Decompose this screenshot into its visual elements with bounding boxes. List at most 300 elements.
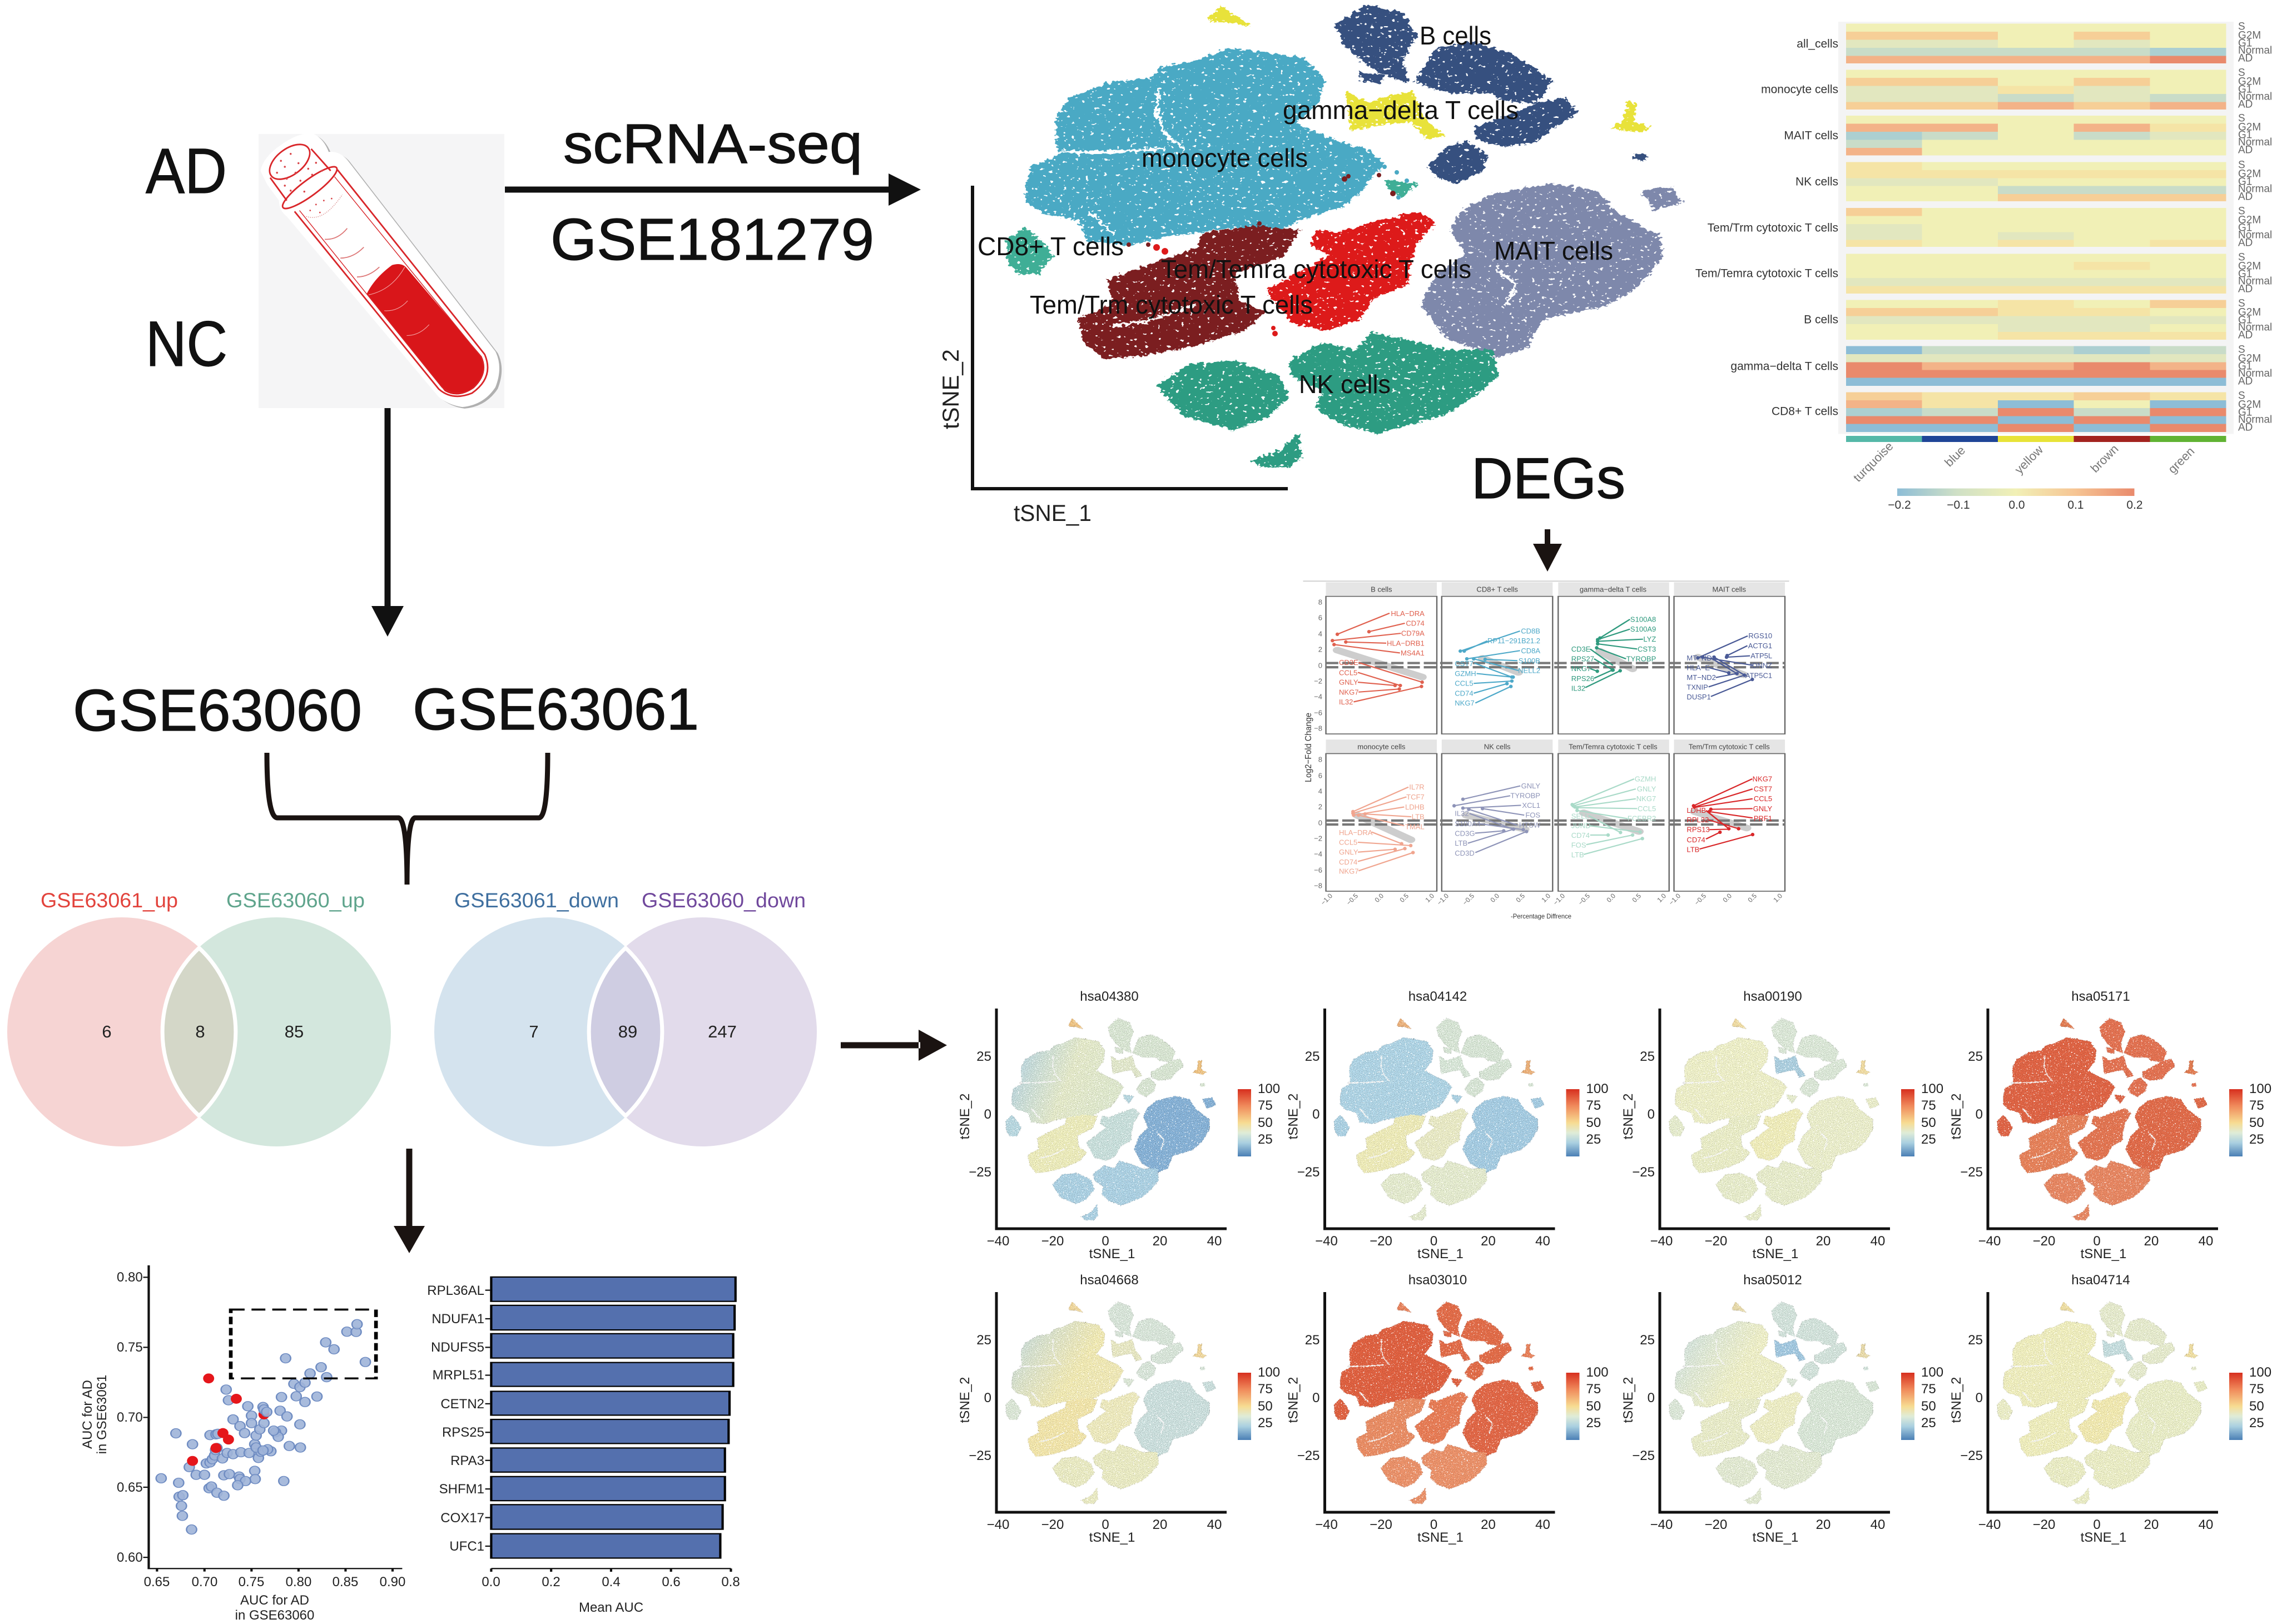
chart: hsa04714 tSNE: 25 — [1968, 1333, 1983, 1348]
chart: volcano plots of DEGs: monocyte cells — [1357, 742, 1406, 751]
volcano: B cells: HLA−DRA — [1391, 609, 1425, 618]
volcano: NK cells: XCL1 — [1522, 801, 1540, 809]
venn: down-regulated: 247 — [708, 1022, 737, 1041]
volcano: monocyte cells: HLA−DRA — [1339, 828, 1373, 837]
chart: hsa04714 tSNE: 0 — [1976, 1390, 1983, 1406]
chart: module score heatmap: G1 — [2238, 83, 2252, 96]
chart: hsa03010 tSNE: 0 — [1312, 1390, 1320, 1406]
chart: hsa04142 tSNE: 50 — [1586, 1115, 1601, 1130]
chart: hsa04380 tSNE: −20 — [1041, 1234, 1064, 1249]
chart: volcano plots of DEGs: −6 — [1314, 866, 1322, 874]
chart: hsa04668 tSNE: 50 — [1258, 1399, 1273, 1414]
chart: module score heatmap: −0.2 — [1888, 499, 1911, 511]
chart: main tSNE clusters: Tem/Temra cytotoxic T cells — [1161, 255, 1471, 284]
chart: module score heatmap: S — [2238, 112, 2245, 125]
chart: hsa03010 tSNE: 20 — [1481, 1517, 1496, 1532]
chart: hsa00190 tSNE: 20 — [1816, 1234, 1830, 1249]
chart: hsa04142 tSNE: hsa04142 — [1408, 989, 1467, 1004]
chart: hsa04714 tSNE: tSNE_2 — [1949, 1377, 1964, 1423]
chart: module score heatmap: Normal — [2238, 183, 2272, 195]
volcano: monocyte cells: CCL5 — [1339, 838, 1357, 846]
chart: module score heatmap: S — [2238, 251, 2245, 264]
chart: module score heatmap: MAIT cells — [1784, 129, 1838, 142]
venn: up-regulated: 85 — [285, 1022, 304, 1041]
volcano: CD8+ T cells: CD74 — [1455, 689, 1474, 697]
volcano: CD8+ T cells: CCL5 — [1455, 679, 1474, 688]
chart: module score heatmap: G1 — [2238, 407, 2252, 418]
volcano: MAIT cells: RGS10 — [1748, 632, 1772, 640]
chart: mean AUC bar chart: 0.2 — [542, 1575, 560, 1590]
volcano: CD8+ T cells: CST7 — [1455, 659, 1474, 668]
venn: up-regulated — [7, 889, 391, 1146]
chart: hsa04380 tSNE: 40 — [1207, 1234, 1222, 1249]
volcano: NK cells: S100A4 — [1455, 820, 1481, 828]
chart: hsa04380 tSNE — [958, 989, 1280, 1262]
chart: volcano plots of DEGs: B cells — [1371, 585, 1392, 593]
chart: volcano plots of DEGs: Log2−Fold Change — [1304, 713, 1313, 782]
chart: hsa05171 tSNE: 0 — [2093, 1234, 2101, 1249]
volcano: Tem/Temra cytotoxic T cells: GZMH — [1635, 774, 1656, 783]
chart: mean AUC bar chart: SHFM1 — [439, 1482, 484, 1497]
chart: hsa05171 tSNE: 75 — [2249, 1098, 2264, 1113]
chart: module score heatmap: CD8+ T cells — [1772, 405, 1838, 418]
volcano: B cells: CD74 — [1406, 619, 1425, 628]
chart: hsa04380 tSNE: 0 — [984, 1107, 991, 1122]
chart: hsa04142 tSNE: 100 — [1586, 1081, 1609, 1096]
chart: hsa04714 tSNE: 20 — [2144, 1517, 2159, 1532]
chart: module score heatmap: G2M — [2238, 399, 2261, 410]
chart: module score heatmap: NK cells — [1795, 176, 1838, 188]
chart: hsa00190 tSNE: 0 — [1765, 1234, 1773, 1249]
chart: mean AUC bar chart: NDUFA1 — [431, 1312, 484, 1327]
volcano: MAIT cells: MT−ND3 — [1686, 654, 1716, 662]
chart: module score heatmap: brown — [2088, 442, 2121, 475]
chart: module score heatmap: Normal — [2238, 276, 2272, 287]
chart: volcano plots of DEGs: gamma−delta T cells — [1580, 585, 1646, 593]
volcano: Tem/Temra cytotoxic T cells: SELL — [1571, 812, 1589, 820]
chart: module score heatmap: G2M — [2238, 307, 2261, 318]
chart: hsa04380 tSNE: 75 — [1258, 1098, 1273, 1113]
chart: module score heatmap: Normal — [2238, 414, 2272, 426]
chart: volcano plots of DEGs: −1.0 — [1667, 892, 1682, 907]
chart: volcano plots of DEGs: 4 — [1318, 787, 1322, 795]
chart: hsa05171 tSNE: −40 — [1978, 1234, 2001, 1249]
volcano: NK cells: CD3D — [1455, 849, 1475, 857]
chart: module score heatmap: G1 — [2238, 38, 2252, 49]
chart: volcano plots of DEGs: 2 — [1318, 645, 1322, 654]
volcano: Tem/Temra cytotoxic T cells: FOS — [1571, 841, 1586, 850]
chart: hsa04714 tSNE: −20 — [2033, 1517, 2055, 1532]
chart: main tSNE clusters: tSNE_1 — [1014, 500, 1092, 526]
volcano: gamma-delta T cells: CD3E — [1571, 645, 1591, 653]
volcano: MAIT cells: ACTG1 — [1748, 642, 1772, 650]
chart: module score heatmap: gamma−delta T cells — [1730, 360, 1838, 373]
chart: module score heatmap: AD — [2238, 284, 2253, 295]
volcano: NK cells: TYROBP — [1510, 792, 1540, 800]
chart: volcano plots of DEGs: 4 — [1318, 629, 1322, 638]
chart: module score heatmap: G2M — [2238, 352, 2261, 365]
chart: mean AUC bar chart: 0.0 — [482, 1575, 500, 1590]
chart: module score heatmap: Normal — [2238, 229, 2272, 241]
chart: AUC scatter plot: AUC for AD — [80, 1380, 95, 1449]
arrow: blood to bulk datasets — [371, 408, 404, 637]
chart: hsa00190 tSNE: −20 — [1705, 1234, 1727, 1249]
chart: hsa03010 tSNE: 50 — [1586, 1399, 1601, 1414]
volcano: NK cells: CD3G — [1455, 829, 1475, 837]
chart: hsa05012 tSNE: 20 — [1816, 1517, 1830, 1532]
heading: GSE181279: GSE181279 — [550, 207, 874, 272]
chart: volcano plots of DEGs: 0.0 — [1373, 892, 1385, 904]
chart: volcano plots of DEGs: 0.0 — [1489, 892, 1501, 904]
chart: hsa04668 tSNE: 25 — [1258, 1416, 1273, 1431]
chart: AUC scatter plot: 0.60 — [117, 1550, 143, 1565]
chart: module score heatmap: Normal — [2238, 44, 2272, 57]
chart: hsa05171 tSNE — [1949, 989, 2271, 1262]
chart: module score heatmap: G1 — [2238, 315, 2252, 326]
volcano: Tem/Temra cytotoxic T cells: CD74 — [1571, 831, 1590, 840]
volcano: monocyte cells: TMAL — [1405, 822, 1425, 831]
chart: module score heatmap: G2M — [2238, 168, 2261, 180]
chart: AUC scatter plot: 0.65 — [117, 1480, 143, 1495]
volcano: Tem/Temra cytotoxic T cells: LTB — [1571, 851, 1584, 859]
chart: module score heatmap: green — [2165, 444, 2197, 476]
volcano: MAIT cells: IDNNZ — [1750, 662, 1772, 670]
chart: hsa04668 tSNE: tSNE_1 — [1089, 1530, 1135, 1545]
volcano: CD8+ T cells: NKG7 — [1455, 699, 1475, 707]
chart: hsa05012 tSNE: hsa05012 — [1743, 1273, 1802, 1288]
venn: down-regulated: GSE63061_down — [454, 889, 619, 912]
chart: hsa04380 tSNE: 25 — [976, 1049, 991, 1064]
volcano: NK cells: GNLY — [1521, 782, 1540, 790]
chart: hsa03010 tSNE: 100 — [1586, 1365, 1609, 1380]
chart: hsa05012 tSNE — [1621, 1273, 1943, 1545]
chart: main tSNE clusters: monocyte cells — [1142, 143, 1308, 172]
chart: module score heatmap: AD — [2238, 376, 2253, 387]
chart: volcano plots of DEGs: 1.0 — [1540, 892, 1552, 904]
volcano: monocyte cells: NKG7 — [1339, 867, 1358, 876]
chart: volcano plots of DEGs: 0.0 — [1605, 892, 1617, 904]
volcano: CD8+ T cells: CD8A — [1521, 647, 1540, 655]
chart: AUC scatter plot: AUC for AD — [240, 1593, 309, 1608]
volcano: gamma-delta T cells: RPS27 — [1571, 654, 1594, 663]
chart: hsa00190 tSNE: hsa00190 — [1743, 989, 1802, 1004]
chart: volcano plots of DEGs: −4 — [1314, 850, 1322, 858]
chart: hsa00190 tSNE: −25 — [1632, 1165, 1655, 1180]
chart: main tSNE clusters: CD8+ T cells — [978, 232, 1124, 261]
chart: AUC scatter plot: 0.65 — [144, 1575, 170, 1590]
chart: volcano plots of DEGs: 8 — [1318, 755, 1322, 764]
chart: hsa03010 tSNE: −20 — [1370, 1517, 1392, 1532]
volcano: monocyte cells: TCF7 — [1406, 793, 1425, 801]
volcano: Tem/Temra cytotoxic T cells: CCL5 — [1638, 804, 1656, 813]
chart: mean AUC bar chart: 0.8 — [721, 1575, 740, 1590]
chart: hsa03010 tSNE: hsa03010 — [1408, 1273, 1467, 1288]
chart: hsa04668 tSNE: −20 — [1041, 1517, 1064, 1532]
volcano: MAIT cells: DUSP1 — [1686, 693, 1711, 701]
chart: volcano plots of DEGs: 0.5 — [1630, 892, 1643, 904]
volcano: B cells — [1331, 609, 1425, 706]
chart: hsa00190 tSNE: tSNE_1 — [1753, 1246, 1798, 1262]
chart: hsa04668 tSNE: 0 — [984, 1390, 991, 1406]
volcano: B cells: MS4A1 — [1401, 649, 1425, 657]
chart: hsa05171 tSNE: 0 — [1976, 1107, 1983, 1122]
chart: hsa04714 tSNE: −25 — [1960, 1448, 1983, 1463]
chart: volcano plots of DEGs: −8 — [1314, 724, 1322, 733]
arrow: blood to scRNA-seq — [505, 173, 921, 206]
chart: hsa05171 tSNE: 50 — [2249, 1115, 2264, 1130]
chart: hsa03010 tSNE: 25 — [1586, 1416, 1601, 1431]
chart: volcano plots of DEGs: 0 — [1318, 662, 1322, 669]
chart: mean AUC bar chart: NDUFS5 — [431, 1340, 484, 1355]
volcano: CD8+ T cells: NELL2 — [1518, 667, 1540, 675]
volcano: Tem/Trm cytotoxic T cells: LDHB — [1686, 806, 1706, 815]
volcano: gamma-delta T cells: TYROBP — [1626, 654, 1656, 663]
chart: hsa00190 tSNE: tSNE_2 — [1621, 1094, 1636, 1139]
chart: module score heatmap: blue — [1942, 443, 1968, 469]
chart: volcano plots of DEGs: −0.5 — [1693, 892, 1708, 907]
chart: hsa04380 tSNE: 50 — [1258, 1115, 1273, 1130]
chart: hsa05171 tSNE: 100 — [2249, 1081, 2271, 1096]
chart: hsa04142 tSNE: −40 — [1315, 1234, 1338, 1249]
chart: hsa05171 tSNE: hsa05171 — [2071, 989, 2130, 1004]
volcano: B cells: CCL5 — [1339, 668, 1357, 677]
chart: volcano plots of DEGs: NK cells — [1484, 742, 1511, 751]
chart: hsa04380 tSNE: hsa04380 — [1080, 989, 1139, 1004]
chart: volcano plots of DEGs: CD8+ T cells — [1476, 585, 1518, 593]
chart: module score heatmap: −0.1 — [1947, 499, 1970, 511]
chart: hsa05012 tSNE: 75 — [1921, 1382, 1936, 1397]
chart: module score heatmap: B cells — [1804, 314, 1838, 326]
chart: hsa04380 tSNE: 100 — [1258, 1081, 1280, 1096]
chart: hsa04668 tSNE: 75 — [1258, 1382, 1273, 1397]
chart: hsa04714 tSNE: 0 — [2093, 1517, 2101, 1532]
chart: hsa00190 tSNE: 0 — [1648, 1107, 1655, 1122]
chart: hsa03010 tSNE: 40 — [1535, 1517, 1550, 1532]
chart: hsa04668 tSNE — [958, 1273, 1280, 1545]
chart: module score heatmap: yellow — [2012, 443, 2046, 476]
chart: hsa04668 tSNE: hsa04668 — [1080, 1273, 1139, 1288]
chart: volcano plots of DEGs: −6 — [1314, 708, 1322, 717]
chart: volcano plots of DEGs: -Percentage Diffrence — [1511, 912, 1571, 920]
chart: module score heatmap: G1 — [2238, 268, 2252, 280]
chart: hsa05012 tSNE: 40 — [1871, 1517, 1885, 1532]
volcano: B cells: GNLY — [1339, 678, 1358, 687]
chart: AUC scatter plot: in GSE63060 — [235, 1608, 314, 1623]
chart: hsa05012 tSNE: 25 — [1921, 1416, 1936, 1431]
volcano: NK cells: LTB — [1455, 839, 1467, 847]
volcano: B cells: NKG7 — [1339, 688, 1358, 696]
chart: hsa04142 tSNE — [1286, 989, 1609, 1262]
chart: AUC scatter plot: 0.90 — [380, 1575, 405, 1590]
chart: module score heatmap: Tem/Temra cytotoxic T cells — [1695, 267, 1838, 280]
chart: hsa04142 tSNE: −20 — [1370, 1234, 1392, 1249]
volcano: MAIT cells — [1686, 632, 1772, 701]
chart: hsa03010 tSNE: −40 — [1315, 1517, 1338, 1532]
chart: hsa04714 tSNE: tSNE_1 — [2081, 1530, 2126, 1545]
chart: hsa05171 tSNE: tSNE_2 — [1949, 1094, 1964, 1139]
chart: hsa00190 tSNE: 25 — [1640, 1049, 1655, 1064]
chart: module score heatmap: 0.1 — [2067, 499, 2084, 511]
chart: module score heatmap: AD — [2238, 421, 2253, 434]
volcano: Tem/Trm cytotoxic T cells: RPS13 — [1686, 826, 1710, 834]
chart: volcano plots of DEGs: 0.5 — [1746, 892, 1758, 904]
chart: mean AUC bar chart: RPS25 — [442, 1425, 484, 1440]
chart: hsa04668 tSNE: 0 — [1102, 1517, 1109, 1532]
chart: volcano plots of DEGs: 8 — [1318, 598, 1322, 606]
volcano: CD8+ T cells: S100B — [1519, 657, 1540, 665]
chart: hsa03010 tSNE: 25 — [1305, 1333, 1320, 1348]
volcano: Tem/Trm cytotoxic T cells: GNLY — [1753, 804, 1773, 813]
chart: module score heatmap: AD — [2238, 52, 2253, 64]
volcano: B cells: IL32 — [1339, 698, 1353, 706]
chart: hsa05012 tSNE: −25 — [1632, 1448, 1655, 1463]
volcano: CD8+ T cells — [1455, 627, 1540, 707]
chart: volcano plots of DEGs: −2 — [1314, 677, 1322, 685]
chart: hsa00190 tSNE — [1621, 989, 1943, 1262]
chart: hsa05012 tSNE: tSNE_1 — [1753, 1530, 1798, 1545]
heading: GSE63060: GSE63060 — [73, 678, 362, 743]
chart: hsa04668 tSNE: −40 — [987, 1517, 1009, 1532]
volcano: gamma-delta T cells: NKG7 — [1571, 664, 1591, 673]
volcano: Tem/Trm cytotoxic T cells: CD74 — [1686, 836, 1705, 844]
volcano: monocyte cells: GNLY — [1339, 848, 1358, 856]
chart: hsa05171 tSNE: 25 — [1968, 1049, 1983, 1064]
chart: hsa04380 tSNE: −25 — [969, 1165, 991, 1180]
chart: hsa04668 tSNE: tSNE_2 — [958, 1377, 973, 1423]
chart: module score heatmap: G1 — [2238, 176, 2252, 188]
chart: module score heatmap: AD — [2238, 191, 2253, 202]
chart: volcano plots of DEGs: −8 — [1314, 882, 1322, 890]
chart: main tSNE clusters: B cells — [1420, 21, 1491, 50]
venn: down-regulated: 89 — [618, 1022, 637, 1041]
chart: AUC scatter plot — [80, 1265, 405, 1623]
volcano: B cells: HLA−DRB1 — [1387, 639, 1425, 647]
heading: scRNA-seq: scRNA-seq — [563, 113, 862, 175]
chart: hsa04668 tSNE: 20 — [1153, 1517, 1167, 1532]
chart: module score heatmap: monocyte cells — [1761, 83, 1838, 96]
chart: mean AUC bar chart: 0.6 — [662, 1575, 681, 1590]
chart: main tSNE clusters: NK cells — [1299, 370, 1391, 399]
chart: module score heatmap: Normal — [2238, 321, 2272, 334]
chart: module score heatmap: S — [2238, 390, 2245, 401]
venn: up-regulated: GSE63061_up — [41, 889, 178, 912]
chart: volcano plots of DEGs: −0.5 — [1576, 892, 1591, 907]
chart: hsa04714 tSNE: 40 — [2199, 1517, 2213, 1532]
volcano: Tem/Trm cytotoxic T cells — [1686, 774, 1773, 854]
chart: hsa04142 tSNE: 0 — [1430, 1234, 1437, 1249]
chart: main tSNE clusters — [937, 6, 1680, 526]
venn: up-regulated: 8 — [195, 1022, 205, 1041]
chart: hsa04668 tSNE: 40 — [1207, 1517, 1222, 1532]
volcano: CD8+ T cells: CD8B — [1521, 627, 1540, 635]
chart: mean AUC bar chart — [427, 1277, 740, 1615]
label: NC: NC — [146, 309, 227, 380]
bracket joining datasets — [267, 753, 548, 885]
chart: main tSNE clusters: tSNE_2 — [937, 349, 964, 429]
chart: mean AUC bar chart: RPL36AL — [427, 1283, 484, 1298]
volcano: gamma-delta T cells: LYZ — [1643, 635, 1656, 643]
volcano: CD8+ T cells: GZMH — [1455, 669, 1476, 678]
venn: down-regulated: GSE63060_down — [642, 889, 806, 912]
chart: hsa05171 tSNE: tSNE_1 — [2081, 1246, 2126, 1262]
chart: module score heatmap: AD — [2238, 145, 2253, 156]
chart: hsa00190 tSNE: 75 — [1921, 1098, 1936, 1113]
chart: module score heatmap: G2M — [2238, 260, 2261, 272]
chart: module score heatmap: S — [2238, 67, 2245, 79]
venn: down-regulated: 7 — [529, 1022, 539, 1041]
chart: AUC scatter plot: 0.85 — [333, 1575, 358, 1590]
chart: hsa04714 tSNE: 100 — [2249, 1365, 2271, 1380]
chart: hsa05171 tSNE: 20 — [2144, 1234, 2159, 1249]
chart: module score heatmap: S — [2238, 298, 2245, 309]
chart: module score heatmap: all_cells — [1797, 38, 1838, 50]
chart: hsa04714 tSNE: 75 — [2249, 1382, 2264, 1397]
chart: volcano plots of DEGs: 1.0 — [1772, 892, 1784, 904]
chart: module score heatmap: AD — [2238, 237, 2253, 249]
chart: AUC scatter plot: in GSE63061 — [95, 1375, 110, 1454]
chart: module score heatmap: AD — [2238, 99, 2253, 110]
chart: hsa00190 tSNE: 50 — [1921, 1115, 1936, 1130]
volcano: gamma-delta T cells — [1571, 615, 1656, 693]
chart: module score heatmap: 0.0 — [2008, 499, 2025, 511]
volcano: Tem/Temra cytotoxic T cells: JUND — [1571, 822, 1590, 830]
chart: volcano plots of DEGs: 0.5 — [1398, 892, 1410, 904]
chart: volcano plots of DEGs: −4 — [1314, 693, 1322, 701]
chart: hsa03010 tSNE: −25 — [1297, 1448, 1320, 1463]
chart: hsa04668 tSNE: 100 — [1258, 1365, 1280, 1380]
volcano: MAIT cells: ATP5C1 — [1745, 671, 1772, 679]
chart: volcano plots of DEGs: 1.0 — [1423, 892, 1436, 904]
volcano: Tem/Temra cytotoxic T cells: FCEBR2 — [1628, 815, 1656, 823]
chart: volcano plots of DEGs: 6 — [1318, 772, 1322, 779]
chart: hsa04380 tSNE: tSNE_1 — [1089, 1246, 1135, 1262]
chart: mean AUC bar chart: UFC1 — [449, 1539, 484, 1554]
chart: hsa04668 tSNE: 25 — [976, 1333, 991, 1348]
chart: hsa03010 tSNE — [1286, 1273, 1609, 1545]
chart: module score heatmap: Normal — [2238, 368, 2272, 379]
chart: hsa04714 tSNE: −40 — [1978, 1517, 2001, 1532]
chart: mean AUC bar chart: RPA3 — [450, 1453, 484, 1468]
chart: module score heatmap: G1 — [2238, 360, 2252, 373]
chart: hsa04142 tSNE: 20 — [1481, 1234, 1496, 1249]
volcano: gamma-delta T cells: CST3 — [1638, 645, 1656, 653]
volcano: gamma-delta T cells: IL32 — [1571, 684, 1585, 693]
chart: hsa05012 tSNE: −20 — [1705, 1517, 1727, 1532]
chart: main tSNE clusters: Tem/Trm cytotoxic T cells — [1030, 290, 1313, 319]
volcano: Tem/Trm cytotoxic T cells: PRF1 — [1754, 815, 1772, 823]
volcano: monocyte cells: IL7R — [1409, 783, 1425, 791]
volcano: gamma-delta T cells: S100A8 — [1630, 615, 1656, 623]
chart: hsa04380 tSNE: tSNE_2 — [958, 1094, 973, 1139]
chart: volcano plots of DEGs: −1.0 — [1551, 892, 1566, 907]
chart: hsa04142 tSNE: 40 — [1535, 1234, 1550, 1249]
volcano: NK cells: HTSW — [1519, 821, 1541, 830]
chart: hsa04142 tSNE: tSNE_2 — [1286, 1094, 1301, 1139]
chart: hsa04142 tSNE: tSNE_1 — [1417, 1246, 1464, 1262]
volcano: MAIT cells: ATP5L — [1750, 652, 1772, 660]
chart: hsa04668 tSNE: −25 — [969, 1448, 991, 1463]
chart: volcano plots of DEGs: 0.0 — [1721, 892, 1733, 904]
chart: hsa04714 tSNE — [1949, 1273, 2271, 1545]
chart: hsa05171 tSNE: 40 — [2199, 1234, 2213, 1249]
volcano: NK cells: FOS — [1525, 811, 1540, 820]
volcano: monocyte cells — [1339, 783, 1425, 876]
chart: mean AUC bar chart: MRPL51 — [433, 1368, 484, 1383]
chart: hsa00190 tSNE: 40 — [1871, 1234, 1885, 1249]
volcano: MAIT cells: TXNIP — [1686, 683, 1708, 691]
chart: volcano plots of DEGs: MAIT cells — [1713, 585, 1747, 593]
chart: AUC scatter plot: 0.80 — [117, 1270, 143, 1285]
